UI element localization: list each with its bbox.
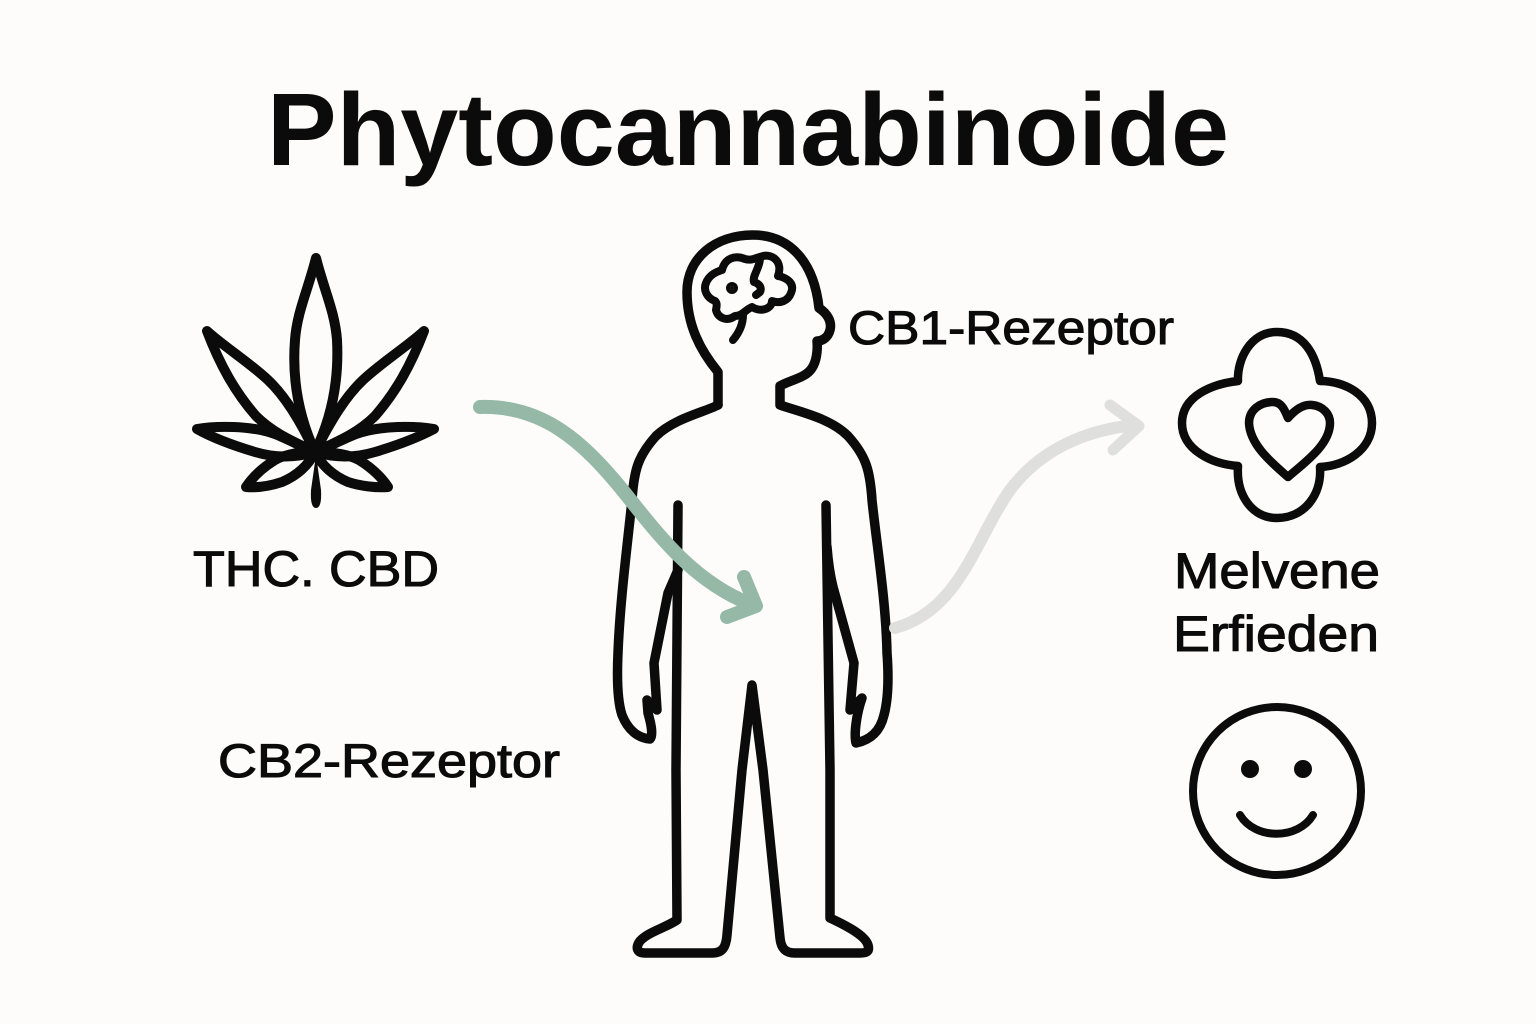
- icon: flower with heart: [1182, 332, 1372, 518]
- label: Melvene Erfieden: [1173, 543, 1380, 662]
- label: CB1-Rezeptor: CB1-Rezeptor: [848, 301, 1174, 354]
- arrow: body to wellbeing: [895, 405, 1139, 628]
- arrow: cannabinoid to body: [480, 407, 756, 617]
- label: Melvene Erfieden: Melvene: [1174, 543, 1380, 599]
- label: Melvene Erfieden: Erfieden: [1173, 606, 1379, 662]
- icon: human figure: [617, 235, 888, 953]
- icon: cannabis leaf: [197, 258, 434, 508]
- icon: brain: [705, 256, 792, 340]
- label: CB2-Rezeptor: CB2-Rezeptor: [218, 734, 560, 787]
- title: Phytocannabinoide: [267, 72, 1229, 187]
- icon: smiley face: [1193, 707, 1361, 875]
- label: THC, CBD: THC. CBD: [193, 541, 439, 597]
